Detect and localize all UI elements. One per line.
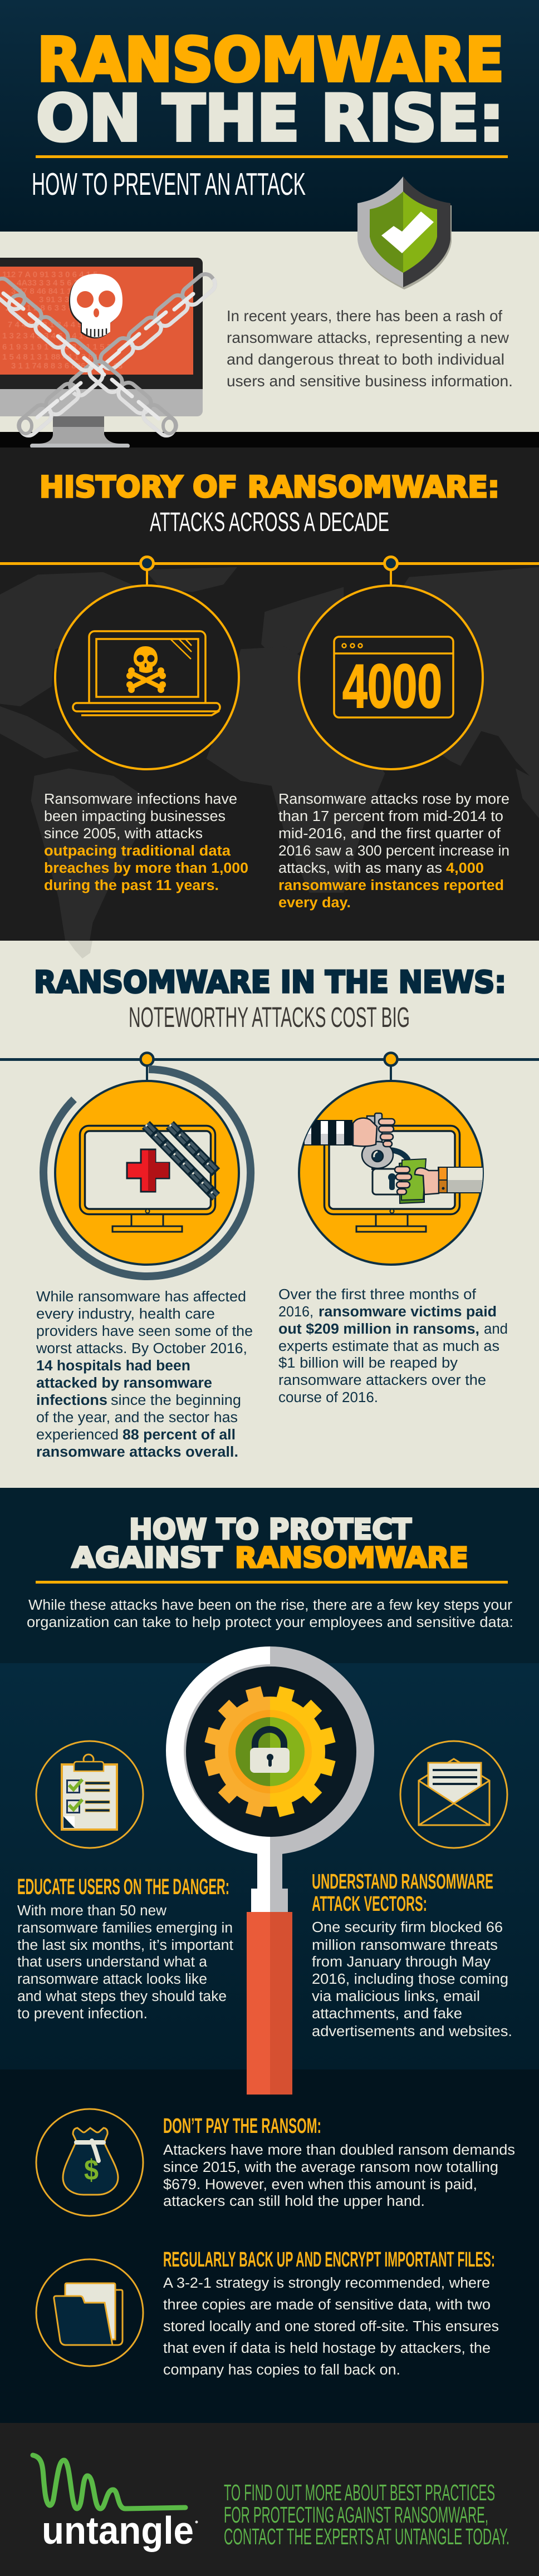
icon: magnifying glass with gear and lock [166,1646,374,2095]
text block: ransoms paid: course of 2016. [278,1390,378,1405]
red screen [0,267,193,375]
logo: untangle [33,2455,198,2552]
panel: how to protect [0,1488,539,2423]
text block: attacks rose: ransomware instances reported [278,878,504,893]
icon: monitor with red cross and chains [55,1081,239,1265]
lock [250,1729,290,1773]
intro text: organization can take to help protect your employees and sensitive data: [27,1615,513,1630]
text block: ransoms paid: Over the first three months of [278,1287,477,1302]
tip: educate users: the last six months, it’s important [17,1938,233,1953]
text block: hospitals: 88 percent of all [122,1427,236,1443]
heading: HISTORY OF RANSOMWARE: [40,470,499,504]
text block: hospitals: infections [36,1393,107,1408]
screen code digits: 3 37 8 46 84 1 112 4 [11,287,87,296]
tip: back up files: three copies are made of sensitive data, with two [163,2297,491,2313]
heading: AGAINST [72,1542,222,1575]
text block: infections since 2005: breaches by more than 1,000 [44,861,248,876]
icon: browser window 4000 [299,586,483,769]
text block: hospitals: worst attacks. By October 2016, [36,1341,247,1356]
icon: hands exchanging key and cash [298,1081,488,1265]
skull and crossbones [126,646,166,693]
tip: back up files: that even if data is held hostage by attackers, the [163,2341,491,2356]
text block: infections since 2005: outpacing traditional data [44,843,231,859]
intro text: While these attacks have been on the rise, there are a few key steps your [28,1597,513,1613]
panel: history of ransomware [0,448,539,942]
tip: attack vectors: from January through May [312,1954,491,1970]
text block: ransoms paid: experts estimate that as much as [278,1339,499,1354]
screen code digits: 1 5 4 8 1 3 1 88 44 1 3 88 [2,352,97,362]
icon: laptop with skull [55,586,239,769]
icon: locked monitor with skull [0,258,218,448]
screen code digits: 112 7 A 0 91 3 3 0 6 4 1 5 [2,270,98,279]
text block: infections since 2005 [44,792,248,893]
text block: attacks rose: every day. [278,895,351,911]
black band under intro [0,432,539,448]
tip: educate users: that users understand what a [17,1954,208,1970]
text block: infections since 2005: Ransomware infections have [44,792,237,807]
icon: shield with check [357,176,452,289]
tip: educate users: ransomware families emerging in [17,1920,233,1936]
chain falling to right [0,275,179,439]
skull [69,274,122,338]
monitor stand [30,416,130,448]
text block: attacks rose [278,792,509,911]
text block: infections since 2005: since 2005, with attacks [44,826,203,842]
panel: ransomware in the news [0,941,539,1488]
heading: HOW TO PROTECT [129,1513,411,1546]
checklist row two [67,1800,110,1812]
text block: attacks rose: than 17 percent from mid-2014 to [278,809,503,824]
tip: attack vectors: via malicious links, email [312,1989,480,2004]
text block: attacks rose: 4,000 [446,861,484,876]
hospital chains [146,1125,216,1197]
text block: hospitals [36,1289,253,1460]
text block: hospitals: providers have seen some of the [36,1324,253,1339]
text block: infections since 2005: been impacting businesses [44,809,226,824]
intro text block: In recent years, there has been a rash of [227,307,502,325]
shirt cuff [439,1167,447,1193]
tip: don't pay: Attackers have more than doubled ransom demands [163,2142,515,2158]
screen code digits: 1 3 2 3 4 3 3 4 6 3 4 1 2 1 [2,331,97,341]
intro text block [227,307,513,390]
timeline [0,1053,539,1081]
icon: envelope [400,1741,507,1848]
tip: educate users: and what steps they should take [17,1989,227,2004]
text block: ransoms paid [278,1287,508,1405]
tip: don't pay: DON’T PAY THE RANSOM: [163,2115,321,2138]
panel: header [0,0,539,232]
tip: educate users [17,1875,233,2022]
divider rule [36,1581,508,1584]
tip: don't pay [163,2115,515,2209]
call to action [224,2480,509,2549]
tip: attack vectors: One security firm blocked 66 [312,1920,503,1935]
screen code digits: 2 4 1 1 2 8 6 3 3 83 1 [6,303,85,313]
tip: don't pay: attackers can still hold the upper hand. [163,2194,425,2209]
icon: clipboard [36,1741,143,1848]
text block: attacks rose: 2016 saw a 300 percent increase in [278,843,509,859]
checklist row [67,1779,110,1792]
text block: attacks rose: attacks, with as many as [278,861,442,876]
tip: attack vectors [312,1870,512,2039]
heading: RANSOMWARE [235,1542,468,1575]
text block: hospitals: attacked by ransomware [36,1375,212,1391]
money [399,1159,426,1203]
hand gripping key [353,1118,395,1147]
tip: attack vectors: advertisements and websites. [312,2024,512,2039]
heading [72,1513,468,1575]
intro text block: users and sensitive business information. [227,372,513,390]
icon: money bag: $ [84,2154,99,2186]
tip: don't pay: since 2015, with the average ransom now totalling [163,2160,498,2175]
panel: footer [0,2423,539,2576]
text block: attacks rose: mid-2016, and the first quarter of [278,826,501,842]
gear [204,1686,336,1817]
world map backdrop [0,567,539,942]
progress arc [43,1069,251,1276]
chain rising to right [16,271,218,439]
tip: educate users: With more than 50 new [17,1903,167,1919]
screen code digits: 6 1 9 3 1 9 1 3 1 3 3 2 1 1 5 3 [2,342,111,352]
text block: ransoms paid: 2016, [278,1304,313,1320]
text block: ransoms paid: out $209 million in ransoms, [278,1321,479,1337]
text block: ransoms paid: $1 billion will be reaped by [278,1355,458,1371]
text block: attacks rose: Ransomware attacks rose by more [278,792,509,807]
screen code digits: 3 91 3 3 40 5 1 6 3 3 [39,295,116,304]
tip: back up files: stored locally and one stored off-site. This ensures [163,2319,499,2334]
tip: back up files [163,2248,499,2378]
text block: hospitals: every industry, health care [36,1306,215,1322]
text block: hospitals: ransomware attacks overall. [36,1444,238,1460]
title: on the rise: ON THE RISE: [36,81,504,155]
handle [247,1848,292,2095]
logo: untangle: untangle [42,2509,194,2552]
text block: ransoms paid: ransomware victims paid [318,1304,497,1320]
tip: don't pay: $679. However, even when this amount is paid, [163,2177,477,2192]
text block: ransoms paid: ransomware attackers over the [278,1373,486,1388]
monitor body [0,258,203,416]
tip: attack vectors: ATTACK VECTORS: [312,1892,427,1916]
key [362,1113,393,1168]
text block: hospitals: experienced [36,1427,119,1443]
screen code digits: 4A33 3 3 4 5 6 3 6 [17,278,85,288]
tip: back up files: company has copies to fall back on. [163,2362,400,2378]
icon: folder [36,2259,143,2366]
text block: hospitals: of the year, and the sector has [36,1410,238,1425]
tip: educate users: EDUCATE USERS ON THE DANGER: [17,1875,229,1899]
red cross [127,1149,169,1192]
tip: attack vectors: million ransomware threats [312,1938,498,1953]
intro text block: and dangerous threat to both individual [227,351,504,368]
text block: hospitals: since the beginning [111,1393,241,1408]
tip: attack vectors: 2016, including those coming [312,1972,508,1987]
text block: infections since 2005: during the past 11 years. [44,878,219,893]
tip: back up files: A 3-2-1 strategy is strongly recommended, where [163,2275,490,2291]
screen code digits: 3 1 1 74 8 8 3 6 836 1 25 1 63 [11,361,122,371]
subheading: ATTACKS ACROSS A DECADE [150,508,389,537]
tip: attack vectors: attachments, and fake [312,2006,462,2022]
intro text block: ransomware attacks, representing a new [227,329,509,346]
text block: hospitals: 14 hospitals had been [36,1358,190,1374]
subtitle: HOW TO PREVENT AN ATTACK [32,166,306,202]
timeline [0,557,539,586]
divider rule [36,155,508,158]
icon: browser window 4000: 4000 [342,652,442,721]
text block: ransoms paid: and [484,1321,508,1337]
title: ransomware: RANSOMWARE [37,26,504,95]
padlock [373,1150,413,1194]
hand giving money [395,1167,439,1194]
screen code digits: 7 4 4 5 1 3 1 8 4 4 5 3 3 1 [8,320,103,330]
heading: RANSOMWARE IN THE NEWS: [34,965,506,1000]
icon: money bag [36,2109,143,2216]
intro text [27,1597,513,1630]
text block: hospitals: While ransomware has affected [36,1289,246,1305]
tip: educate users: ransomware attack looks like [17,1972,207,1987]
villain sleeve and hand [298,1120,488,1193]
panel: intro [0,232,539,432]
tip: educate users: to prevent infection. [17,2006,148,2022]
screen code digits [2,270,122,371]
lens ring [166,1646,374,1855]
